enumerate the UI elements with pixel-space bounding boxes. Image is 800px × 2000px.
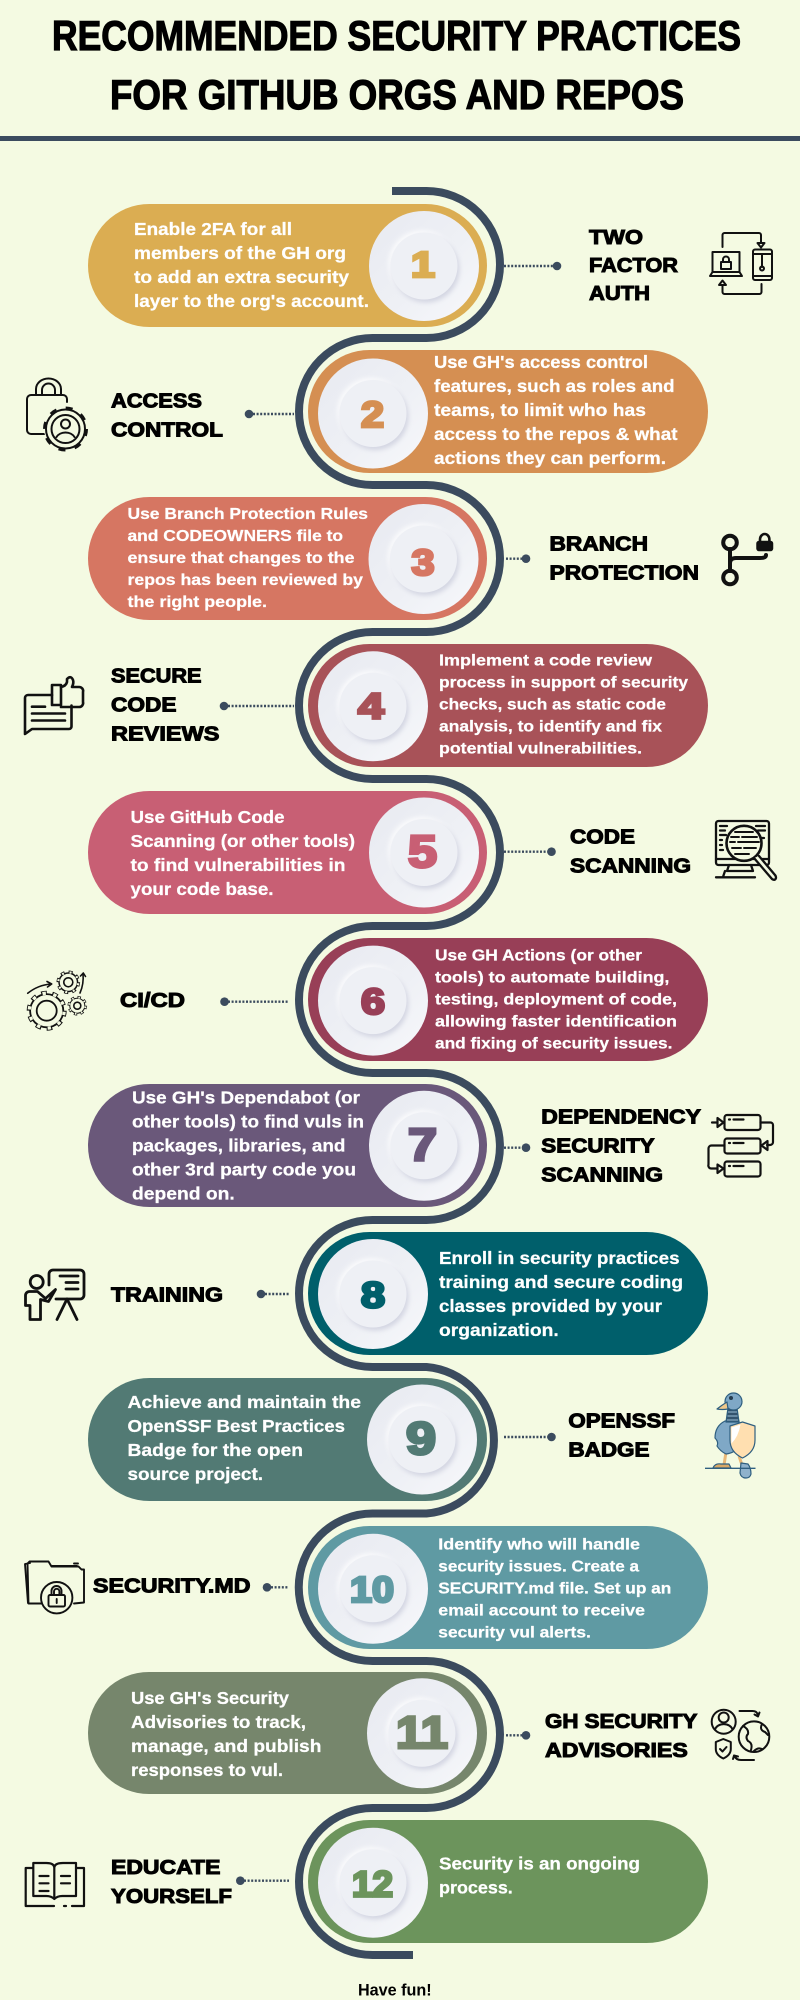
text 8: organization. — [439, 1320, 559, 1340]
pill 1 — [88, 204, 487, 327]
pill 10 — [308, 1526, 708, 1649]
heading 4 — [111, 666, 220, 746]
text 1: layer to the org's account. — [134, 291, 369, 311]
heading 3: PROTECTION — [550, 562, 699, 584]
text 1 — [134, 219, 369, 311]
heading 2: ACCESS — [111, 390, 202, 412]
heading 9: OPENSSF — [568, 1411, 675, 1433]
icon: person, globe, shield — [712, 1710, 769, 1760]
pill 3 — [88, 497, 487, 620]
text 7: Use GH's Dependabot (or — [132, 1087, 360, 1107]
text 5 — [130, 807, 355, 899]
step 12: educate yourself — [26, 1820, 708, 1943]
text 10 — [438, 1537, 671, 1642]
text 11: Advisories to track, — [131, 1712, 306, 1732]
text 10: security issues. Create a — [438, 1559, 639, 1576]
text 3: ensure that changes to the — [128, 550, 355, 567]
text 9: source project. — [128, 1464, 263, 1484]
connector 11 — [506, 1731, 530, 1740]
heading 11: ADVISORIES — [545, 1740, 688, 1762]
text 9: OpenSSF Best Practices — [128, 1416, 345, 1436]
icon: folder with lock — [25, 1562, 84, 1613]
heading 12 — [111, 1857, 232, 1908]
heading 7: SECURITY — [541, 1136, 655, 1158]
icon: branch with lock — [723, 534, 772, 584]
text 3 — [128, 506, 368, 611]
number 8: 8 — [361, 1274, 385, 1316]
icon: dependency boxes — [708, 1115, 773, 1176]
pill 4 — [308, 644, 708, 767]
icon: goose with shield — [705, 1393, 756, 1478]
text 9: Achieve and maintain the — [128, 1392, 361, 1412]
number 6: 6 — [361, 981, 385, 1022]
connector 5 — [504, 847, 556, 856]
pill 8 — [308, 1232, 708, 1355]
number 7: 7 — [408, 1119, 437, 1170]
step 4: secure code reviews — [25, 644, 708, 767]
text 5: to find vulnerabilities in — [130, 855, 346, 875]
connector 4 — [220, 702, 294, 710]
text 12: process. — [439, 1877, 513, 1897]
heading 2 — [111, 390, 223, 442]
icon: gears — [28, 972, 86, 1029]
heading 1 — [589, 227, 679, 305]
text 11: responses to vul. — [131, 1760, 283, 1780]
title — [52, 12, 741, 118]
connector 1 — [504, 262, 561, 270]
number 2: 2 — [361, 394, 384, 435]
text 2: actions they can perform. — [434, 448, 666, 468]
text 10: email account to receive — [438, 1603, 645, 1620]
number 9: 9 — [406, 1413, 436, 1464]
text 10: security vul alerts. — [438, 1625, 591, 1642]
number 12: 12 — [352, 1864, 393, 1904]
number disc 4 — [318, 651, 428, 761]
pill 11 — [88, 1672, 487, 1794]
heading 8: TRAINING — [111, 1285, 223, 1307]
number 3: 3 — [412, 542, 434, 583]
text 3: repos has been reviewed by — [128, 572, 363, 589]
icon: laptop and phone 2FA — [710, 233, 772, 294]
text 12 — [439, 1853, 640, 1897]
text 4: process in support of security — [439, 675, 688, 692]
connector 8 — [257, 1290, 289, 1298]
pill 9 — [88, 1378, 487, 1501]
number 1: 1 — [411, 244, 435, 285]
text 3: and CODEOWNERS file to — [128, 528, 343, 545]
step 10: security.md — [25, 1526, 708, 1649]
number 4: 4 — [358, 686, 384, 726]
text 8 — [439, 1248, 683, 1340]
pill 2 — [308, 350, 708, 473]
text 6: testing, deployment of code, — [435, 992, 677, 1009]
number disc 9 — [367, 1384, 477, 1494]
heading 7 — [541, 1107, 702, 1187]
text 6: and fixing of security issues. — [435, 1036, 672, 1053]
step 6: ci/cd — [28, 938, 708, 1061]
text 9 — [128, 1392, 361, 1484]
step 3: branch protection — [88, 497, 772, 620]
heading 5 — [570, 826, 691, 877]
heading 1: AUTH — [589, 283, 650, 305]
heading 4: SECURE — [111, 666, 202, 688]
text 7 — [132, 1087, 364, 1203]
heading 9: BADGE — [568, 1440, 650, 1462]
number 11: 11 — [396, 1707, 448, 1758]
connector 10 — [263, 1583, 289, 1592]
icon: trainer at board — [26, 1270, 84, 1320]
winding path — [299, 191, 500, 1955]
text 10: SECURITY.md file. Set up an — [438, 1581, 671, 1598]
text 6: tools) to automate building, — [435, 970, 669, 987]
text 7: other tools) to find vuls in — [132, 1111, 364, 1131]
heading 2: CONTROL — [111, 420, 223, 442]
text 7: packages, libraries, and — [132, 1135, 345, 1155]
heading 6: CI/CD — [120, 990, 185, 1012]
footer note: Have fun! — [358, 1982, 432, 2000]
heading 10: SECURITY.MD — [93, 1576, 250, 1598]
text 4: analysis, to identify and fix — [439, 719, 662, 736]
number disc 11 — [367, 1678, 477, 1788]
text 1: Enable 2FA for all — [134, 219, 292, 239]
text 12: Security is an ongoing — [439, 1853, 640, 1873]
text 3: the right people. — [128, 594, 267, 611]
pill 7 — [88, 1084, 487, 1207]
heading 3 — [550, 534, 699, 584]
pill 6 — [308, 938, 708, 1061]
text 10: Identify who will handle — [438, 1537, 640, 1554]
number 10: 10 — [350, 1569, 394, 1610]
title: FOR GITHUB ORGS AND REPOS — [110, 71, 684, 118]
text 4 — [439, 653, 688, 758]
heading 11 — [545, 1711, 698, 1762]
connector 3 — [506, 554, 530, 563]
heading 5: CODE — [570, 826, 635, 848]
step 1: two factor auth — [88, 204, 772, 327]
number 5: 5 — [408, 826, 437, 877]
heading 4: CODE — [111, 695, 176, 717]
number disc 12 — [318, 1828, 428, 1938]
icon: lock and gear — [27, 378, 87, 450]
step 5: code scanning — [88, 791, 776, 914]
text 2 — [434, 352, 678, 468]
heading 12: EDUCATE — [111, 1857, 220, 1879]
pill 5 — [88, 791, 487, 914]
number disc 8 — [318, 1239, 428, 1349]
heading 3: BRANCH — [550, 534, 648, 556]
text 4: checks, such as static code — [439, 697, 666, 714]
connector 7 — [504, 1143, 530, 1152]
heading 11: GH SECURITY — [545, 1711, 698, 1733]
step 2: access control — [27, 350, 708, 473]
heading 7: DEPENDENCY — [541, 1107, 702, 1129]
text 6: allowing faster identification — [435, 1014, 677, 1031]
text 8: Enroll in security practices — [439, 1248, 680, 1268]
pill 12 — [308, 1820, 708, 1943]
step 8: training — [26, 1232, 708, 1355]
number disc 7 — [369, 1091, 479, 1201]
text 1: members of the GH org — [134, 243, 346, 263]
text 2: Use GH's access control — [434, 352, 648, 372]
step 9: openssf badge — [88, 1378, 756, 1501]
text 6 — [435, 948, 677, 1053]
icon: chat and thumbs up — [25, 677, 83, 734]
text 8: classes provided by your — [439, 1296, 662, 1316]
number disc 2 — [318, 358, 428, 468]
step 7: dependency security scanning — [88, 1084, 773, 1207]
text 2: access to the repos & what — [434, 424, 678, 444]
number disc 5 — [369, 798, 479, 908]
connector 6 — [220, 997, 289, 1006]
text 5: Use GitHub Code — [130, 807, 285, 827]
text 4: Implement a code review — [439, 653, 653, 670]
connector 2 — [245, 410, 294, 418]
heading 12: YOURSELF — [111, 1886, 232, 1908]
text 11: Use GH's Security — [131, 1688, 289, 1708]
heading 4: REVIEWS — [111, 724, 220, 746]
number disc 3 — [368, 504, 478, 614]
heading 1: FACTOR — [589, 255, 679, 277]
heading 1: TWO — [589, 227, 643, 249]
connector 12 — [236, 1876, 289, 1885]
text 2: features, such as roles and — [434, 376, 674, 396]
text 5: Scanning (or other tools) — [130, 831, 355, 851]
heading 7: SCANNING — [541, 1165, 663, 1187]
icon: open book — [26, 1863, 84, 1906]
text 8: training and secure coding — [439, 1272, 683, 1292]
text 9: Badge for the open — [128, 1440, 303, 1460]
text 7: depend on. — [132, 1183, 235, 1203]
text 3: Use Branch Protection Rules — [128, 506, 368, 523]
number disc 6 — [318, 946, 428, 1056]
heading 9 — [568, 1411, 675, 1462]
text 5: your code base. — [130, 879, 274, 899]
text 11 — [131, 1688, 321, 1780]
text 7: other 3rd party code you — [132, 1159, 356, 1179]
text 6: Use GH Actions (or other — [435, 948, 642, 965]
heading 5: SCANNING — [570, 855, 691, 877]
icon: monitor and magnifier — [716, 821, 776, 880]
number disc 1 — [369, 211, 479, 321]
text 4: potential vulnerabilities. — [439, 741, 642, 758]
connector 9 — [504, 1433, 556, 1441]
text 1: to add an extra security — [134, 267, 349, 287]
number disc 10 — [318, 1534, 428, 1644]
text 11: manage, and publish — [131, 1736, 321, 1756]
step 11: gh security advisories — [88, 1672, 769, 1794]
text 2: teams, to limit who has — [434, 400, 646, 420]
